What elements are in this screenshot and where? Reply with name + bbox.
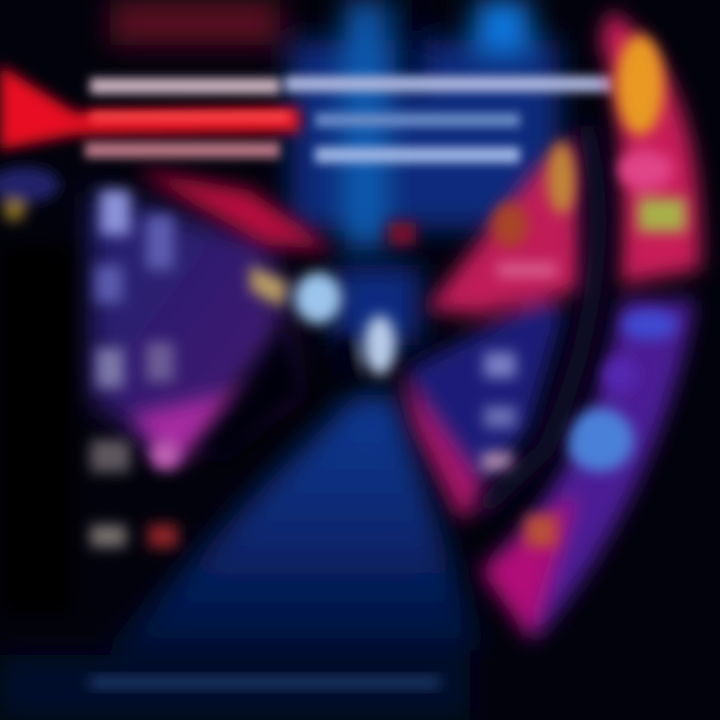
- left wall list items: [90, 190, 180, 548]
- inner right details: [482, 142, 577, 472]
- top glow: [110, 0, 560, 250]
- center bright highlights: [250, 265, 396, 382]
- corridor floor: [0, 395, 480, 720]
- center blue glow: [335, 265, 420, 345]
- left wall magenta strip: [130, 378, 295, 465]
- right outer details: [525, 35, 686, 547]
- inner right panel: [400, 135, 582, 520]
- red diagonal band: [135, 170, 335, 250]
- dark curved divider: [480, 125, 598, 510]
- center dark wedge: [190, 320, 312, 465]
- left small emblem: [0, 167, 416, 246]
- title text lines: [85, 76, 615, 163]
- left wall panel: [90, 190, 295, 455]
- footer text band: [90, 677, 440, 688]
- red title wedge: [0, 65, 300, 150]
- left black column: [0, 245, 72, 615]
- right outer curved band: [480, 10, 700, 640]
